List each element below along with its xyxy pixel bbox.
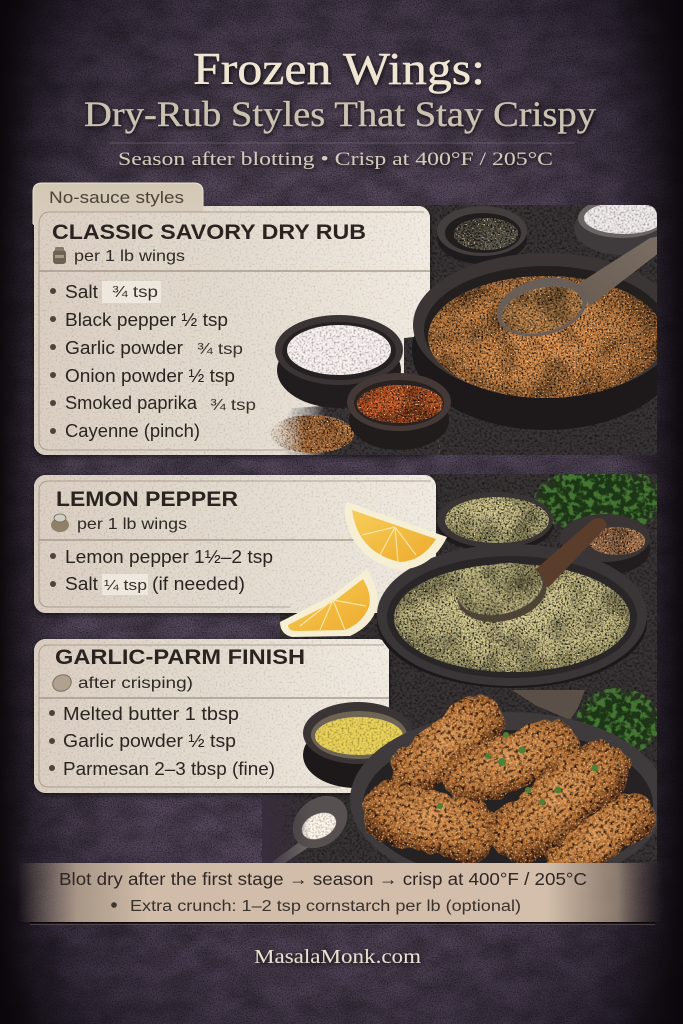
large plate of lemon pepper <box>377 544 647 688</box>
large bowl of dry rub <box>412 253 680 430</box>
ingredient list: Parmesan 2–3 tbsp (fine) <box>63 759 275 779</box>
salt bowl top right <box>574 205 657 255</box>
butter bowl <box>303 702 413 788</box>
ingredient list: ¾ tsp <box>210 397 256 414</box>
paprika bowl <box>347 373 451 450</box>
ingredient list: ¾ tsp <box>197 341 243 358</box>
panel: classic savory dry rub <box>33 183 680 455</box>
footer line 2: Extra crunch: 1–2 tsp cornstarch per lb (optional) <box>130 898 521 915</box>
card <box>34 639 389 793</box>
ingredient list: Smoked paprika <box>65 393 198 413</box>
spoon <box>496 236 657 336</box>
ingredient list: Garlic powder ½ tsp <box>63 731 236 751</box>
footer line 1: Blot dry after the first stage → season → crisp at 400°F / 205°C <box>59 869 587 889</box>
title: Frozen Wings: <box>193 43 485 94</box>
panel: garlic-parm finish <box>34 639 389 793</box>
website credit: MasalaMonk.com <box>254 946 421 968</box>
ingredient list <box>50 547 273 595</box>
ingredient list <box>49 704 275 779</box>
ingredient list: Lemon pepper 1½–2 tsp <box>65 547 273 567</box>
ingredient list: ¼ tsp <box>104 577 147 594</box>
footer note band <box>18 863 663 925</box>
lemon wedge lower <box>280 569 378 637</box>
heading: LEMON PEPPER <box>56 488 238 511</box>
small red pepper bowl <box>560 514 650 575</box>
spice pile on slab <box>270 415 354 453</box>
ingredient list: Onion powder ½ tsp <box>65 366 235 386</box>
lemon wedge upper <box>345 502 447 570</box>
ingredient list: Salt <box>65 574 98 594</box>
green seasoning bowl <box>437 492 553 552</box>
parsley right <box>576 688 657 751</box>
title <box>84 43 596 134</box>
ingredient list: Salt <box>65 282 98 302</box>
card <box>34 206 430 455</box>
serving note: per 1 lb wings <box>77 516 187 533</box>
tab: no-sauce styles <box>33 183 204 225</box>
wing plate <box>350 712 657 863</box>
subtitle: Season after blotting • Crisp at 400°F / 205°C <box>118 149 553 170</box>
panel: photo surface behind lemon pepper and garlic-parm <box>262 474 657 863</box>
timing note: after crisping) <box>78 675 193 692</box>
panel: lemon pepper <box>34 475 436 613</box>
tab: no-sauce styles: No-sauce styles <box>49 189 184 207</box>
knife <box>512 690 585 720</box>
icon: garlic <box>50 672 74 694</box>
parsley top <box>534 474 657 528</box>
title: Dry-Rub Styles That Stay Crispy <box>84 94 596 134</box>
ingredient list: (if needed) <box>152 574 245 594</box>
salt bowl <box>275 315 403 408</box>
ingredient list: Black pepper ½ tsp <box>65 310 228 330</box>
heading: GARLIC-PARM FINISH <box>55 646 305 669</box>
wings <box>362 694 656 863</box>
dark fade at lower left <box>262 795 310 863</box>
ingredient list: Cayenne (pinch) <box>65 421 200 441</box>
icon: jar <box>53 247 66 264</box>
photo: spice bowls <box>270 198 680 455</box>
serving note: per 1 lb wings <box>74 248 185 265</box>
parsley garnish <box>437 732 598 809</box>
ingredient list <box>50 281 256 441</box>
icon: pepper <box>51 514 69 532</box>
ingredient list: ¾ tsp <box>112 284 158 301</box>
heading: CLASSIC SAVORY DRY RUB <box>52 221 366 244</box>
wooden spoon <box>452 518 607 630</box>
pepper bowl <box>437 206 527 264</box>
ingredient list: Garlic powder <box>65 338 183 358</box>
photo: lemon pepper and wings dishes <box>262 474 657 863</box>
card <box>34 475 436 613</box>
metal spoon with parmesan <box>272 796 348 863</box>
ingredient list: Melted butter 1 tbsp <box>63 704 239 724</box>
photo background: spice surface <box>425 205 657 455</box>
